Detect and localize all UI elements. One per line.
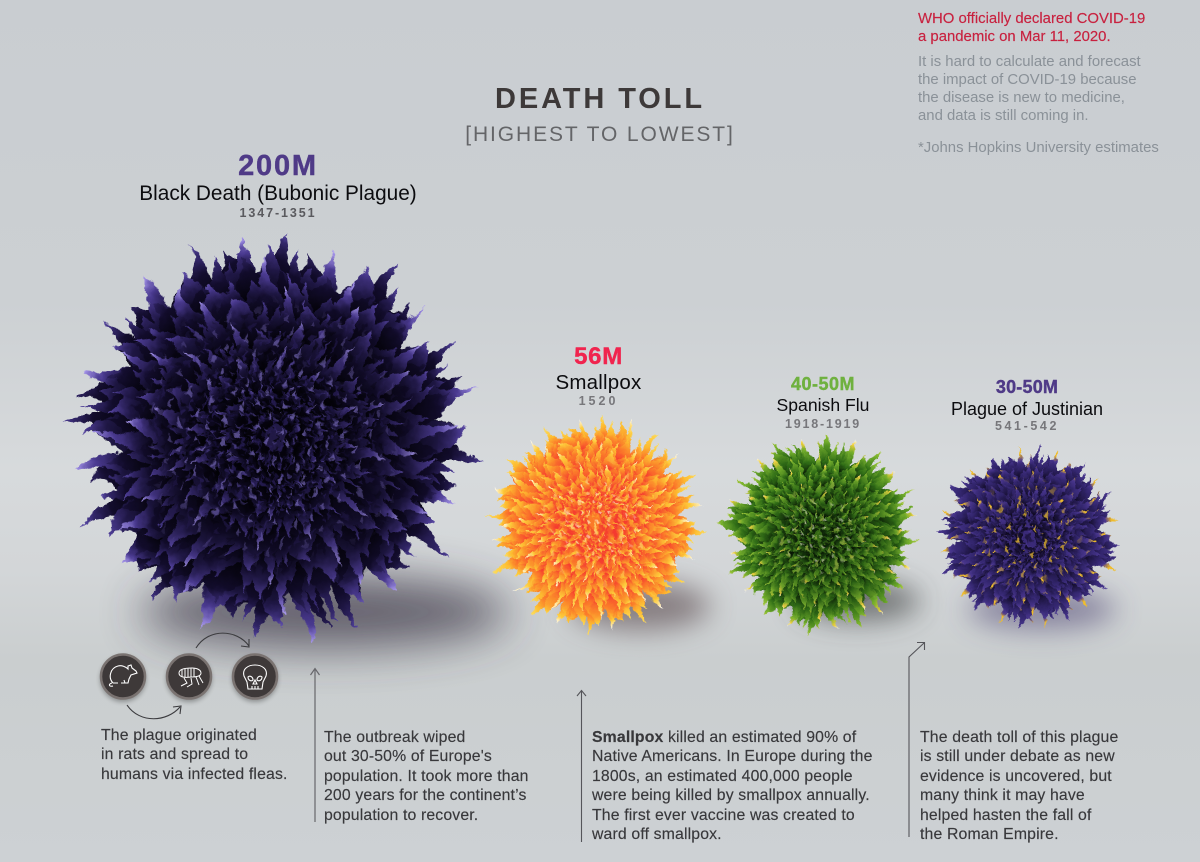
note: data caveat: the impact of COVID-19 because bbox=[918, 72, 1137, 88]
virus sphere: Plague of Justinian bbox=[936, 444, 1120, 630]
note: data caveat: It is hard to calculate and forecast bbox=[918, 54, 1141, 70]
number: 30-50M bbox=[996, 377, 1058, 397]
icon: skull bbox=[232, 654, 278, 702]
text: rats and fleas bbox=[101, 727, 288, 783]
note: data caveat bbox=[918, 54, 1141, 124]
note: WHO declaration: WHO officially declared COVID-19 bbox=[918, 11, 1145, 27]
text: Smallpox: were being killed by smallpox annually. bbox=[592, 787, 870, 804]
text: Europe population: 200 years for the continent’s bbox=[324, 787, 527, 804]
text: rats and fleas: The plague originated bbox=[101, 727, 257, 744]
text: Justinian: The death toll of this plague bbox=[920, 729, 1118, 746]
label: Plague of Justinian bbox=[951, 377, 1103, 433]
text: Europe population: The outbreak wiped bbox=[324, 729, 465, 746]
number: 56M bbox=[574, 343, 623, 370]
text: Europe population: out 30-50% of Europe's bbox=[324, 748, 492, 765]
arrow: Smallpox note bbox=[577, 690, 586, 842]
icon: flea bbox=[166, 654, 212, 702]
label: Spanish Flu bbox=[777, 374, 869, 431]
years: 1347-1351 bbox=[240, 206, 316, 220]
text: Smallpox bbox=[592, 729, 873, 843]
note: data caveat: the disease is new to medicine, bbox=[918, 90, 1125, 106]
text: rats and fleas: in rats and spread to bbox=[101, 746, 248, 763]
virus sphere: Smallpox bbox=[484, 415, 707, 636]
ball shadow: Smallpox bbox=[570, 582, 710, 630]
text: Smallpox: 1800s, an estimated 400,000 people bbox=[592, 768, 853, 785]
number: 200M bbox=[238, 150, 318, 182]
text: Europe population: population. It took more than bbox=[324, 768, 529, 785]
text: Justinian: is still under debate as new bbox=[920, 748, 1115, 765]
name: Plague of Justinian bbox=[951, 399, 1103, 419]
arrow: flea to skull bbox=[196, 633, 249, 648]
note: WHO declaration bbox=[918, 11, 1145, 45]
note: source: *Johns Hopkins University estimates bbox=[918, 140, 1159, 156]
note: WHO declaration: a pandemic on Mar 11, 2020. bbox=[918, 29, 1111, 45]
text: rats and fleas: humans via infected fleas. bbox=[101, 766, 288, 783]
arrow: rat to flea bbox=[127, 705, 181, 719]
ball shadow: Spanish Flu bbox=[796, 581, 920, 621]
virus sphere: Black Death bbox=[62, 233, 484, 643]
years: 541-542 bbox=[995, 419, 1059, 433]
text: Justinian: many think it may have bbox=[920, 787, 1085, 804]
icon: rat bbox=[100, 654, 146, 702]
years: 1918-1919 bbox=[785, 417, 861, 431]
text: Smallpox: Smallpox killed an estimated 90% of bbox=[592, 729, 856, 746]
text: Smallpox: ward off smallpox. bbox=[592, 826, 722, 843]
text: Justinian bbox=[920, 729, 1118, 843]
name: Spanish Flu bbox=[777, 395, 869, 415]
name: Black Death (Bubonic Plague) bbox=[139, 182, 417, 205]
text: Smallpox: The first ever vaccine was created to bbox=[592, 807, 855, 824]
years: 1520 bbox=[579, 394, 618, 408]
number: 40-50M bbox=[791, 374, 855, 394]
name: Smallpox bbox=[556, 371, 641, 394]
virus sphere: Spanish Flu bbox=[716, 434, 920, 636]
label: Black Death bbox=[139, 150, 417, 220]
text: Justinian: helped hasten the fall of bbox=[920, 807, 1092, 824]
text: Europe population: population to recover. bbox=[324, 807, 478, 824]
arrow: Justinian note bbox=[909, 642, 924, 837]
note: data caveat: and data is still coming in. bbox=[918, 108, 1089, 124]
text: Smallpox: Native Americans. In Europe during the bbox=[592, 748, 873, 765]
subtitle: [HIGHEST TO LOWEST] bbox=[465, 123, 735, 146]
label: Smallpox bbox=[556, 343, 641, 408]
text: Justinian: the Roman Empire. bbox=[920, 826, 1059, 843]
ball shadow: Plague of Justinian bbox=[968, 589, 1116, 629]
arrow: Black Death note bbox=[310, 668, 320, 822]
ball shadow: Black Death bbox=[140, 576, 510, 648]
text: Justinian: evidence is uncovered, but bbox=[920, 768, 1112, 785]
title: DEATH TOLL bbox=[495, 83, 705, 115]
text: Europe population bbox=[324, 729, 529, 824]
